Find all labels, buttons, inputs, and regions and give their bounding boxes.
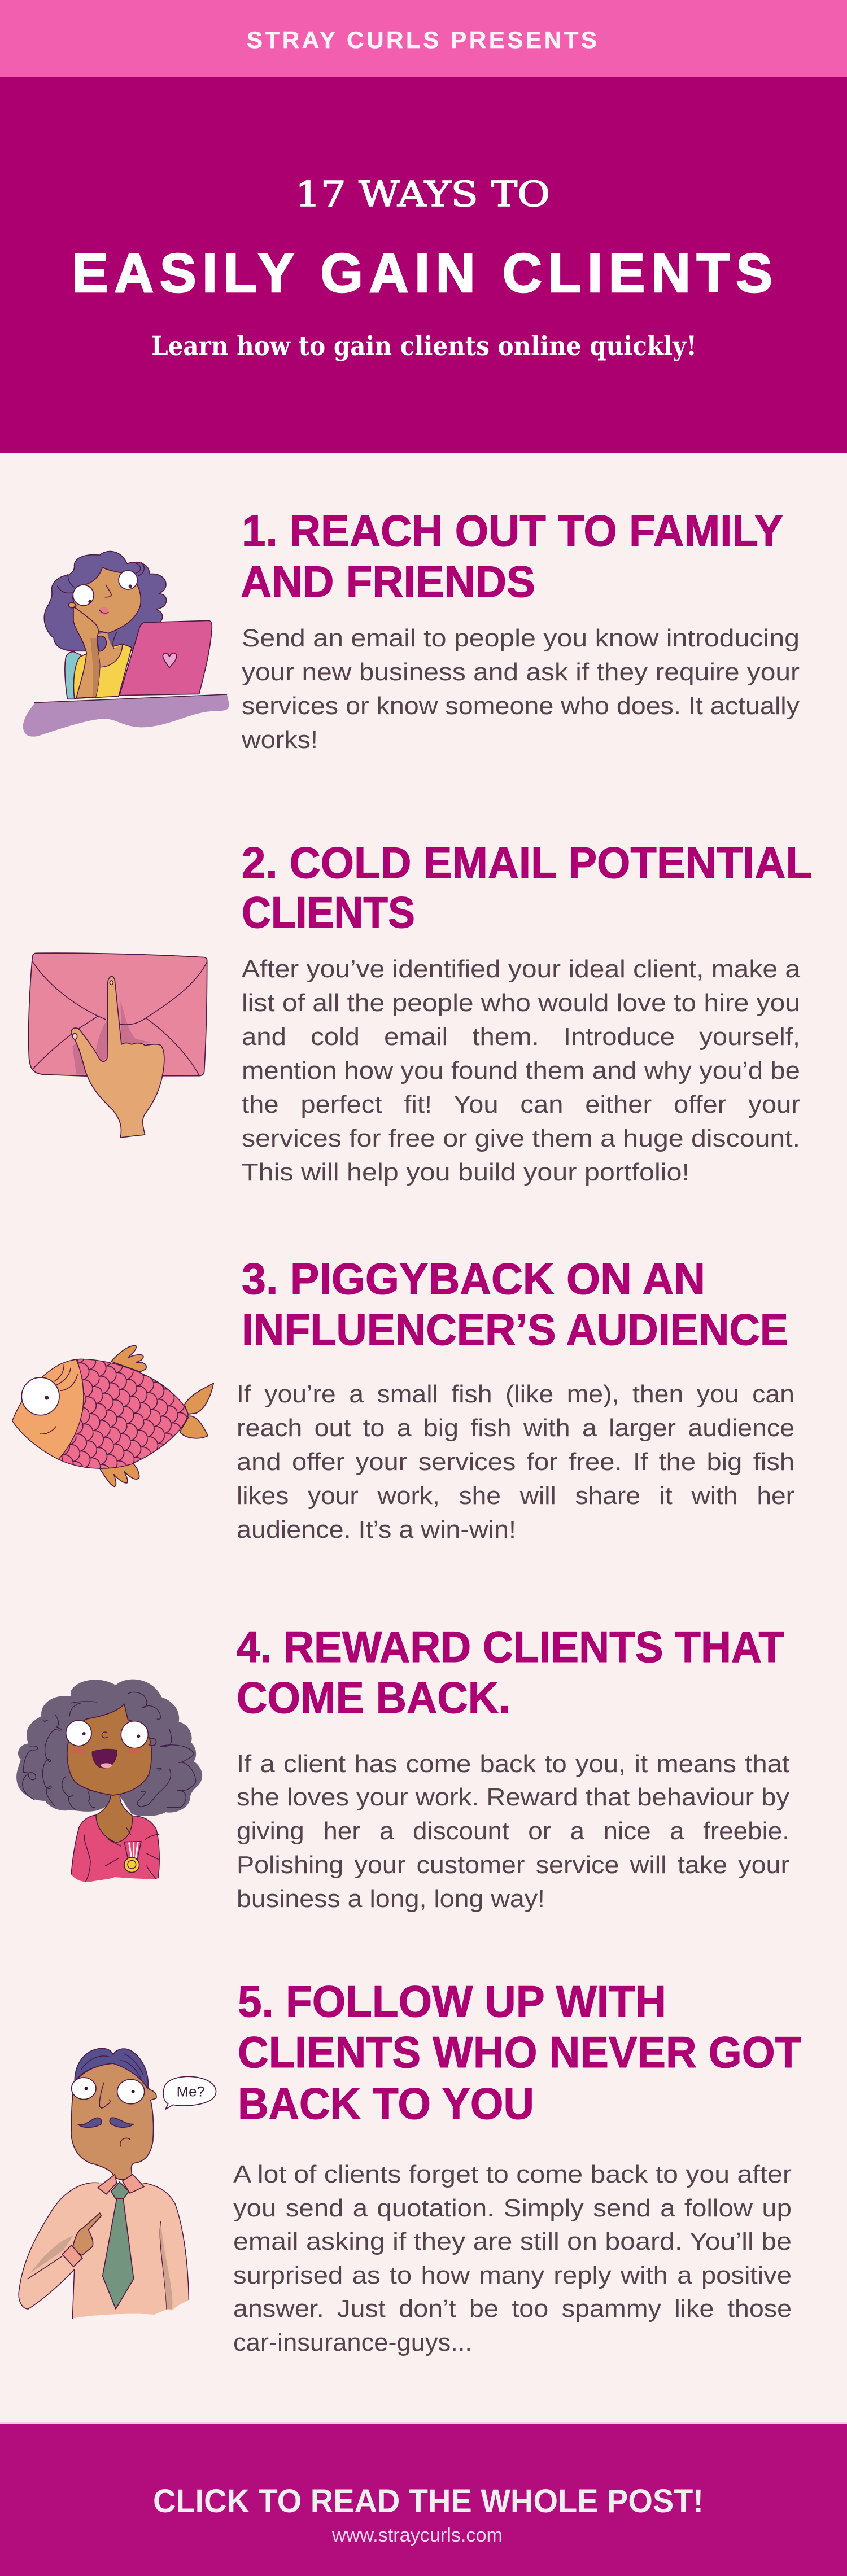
panel: step 3 [12, 1254, 794, 1543]
body text: and offer your services for free. If the big fish [237, 1448, 794, 1476]
icon: woman at laptop [23, 552, 229, 737]
heading: INFLUENCER’S AUDIENCE [242, 1305, 788, 1354]
heading: CLIENTS [242, 887, 415, 937]
body text: If you’re a small fish (like me), then you can [237, 1380, 794, 1408]
heading: BACK TO YOU [238, 2079, 534, 2128]
body text: and cold email them. Introduce yourself, [242, 1023, 800, 1051]
body text: surprised as to how many reply with a positive [233, 2262, 792, 2289]
body text: reach out to a big fish with a larger audience [237, 1414, 794, 1442]
body text: A lot of clients forget to come back to you after [233, 2160, 792, 2188]
call to action: CLICK TO READ THE WHOLE POST! [153, 2483, 704, 2520]
body text: answer. Just don’t be too spammy like those [233, 2295, 792, 2323]
heading [237, 1622, 784, 1722]
heading: 1. REACH OUT TO FAMILY [242, 506, 783, 556]
icon: envelope and hand [29, 953, 207, 1138]
heading [242, 1254, 788, 1354]
body text: services for free or give them a huge discount. [242, 1125, 800, 1152]
heading: AND FRIENDS [241, 557, 535, 606]
body text [233, 2160, 792, 2356]
speech bubble [163, 2076, 216, 2109]
panel: step 5 [19, 1976, 801, 2356]
body text: After you’ve identified your ideal client, make a [242, 955, 801, 983]
body text [237, 1380, 794, 1543]
heading [238, 1976, 801, 2128]
top banner: STRAY CURLS PRESENTS [247, 27, 597, 53]
heading: 4. REWARD CLIENTS THAT [237, 1622, 784, 1672]
panel: step 4 [16, 1622, 789, 1913]
icon: happy woman with medal [16, 1680, 202, 1882]
title line: 17 ways to: 17 WAYS TO [295, 173, 550, 215]
body text: likes your work, she will share it with her [237, 1482, 794, 1510]
heading [241, 506, 783, 606]
panel: step 1 [23, 506, 800, 754]
subtitle: Learn how to gain clients online quickly! [151, 331, 697, 362]
heading: 5. FOLLOW UP WITH [238, 1976, 666, 2026]
body text: you send a quotation. Simply send a follow up [233, 2194, 792, 2222]
body text: This will help you build your portfolio! [242, 1158, 689, 1186]
website url: www.straycurls.com [331, 2525, 503, 2546]
heading [242, 838, 812, 937]
body text: she loves your work. Reward that behaviour by [237, 1783, 789, 1811]
body text [237, 1750, 789, 1913]
icon: man pointing at himself [19, 2048, 216, 2319]
body text: Polishing your customer service will take your [237, 1851, 789, 1879]
body text: the perfect fit! You can either offer your [242, 1091, 800, 1118]
body text: email asking if they are still on board. You’ll be [233, 2228, 792, 2255]
body text: list of all the people who would love to hire you [242, 989, 800, 1017]
body text: business a long, long way! [237, 1885, 545, 1913]
top banner [0, 0, 847, 77]
speech bubble: Me? [177, 2084, 205, 2100]
body text: car-insurance-guys... [233, 2329, 472, 2356]
body text: If a client has come back to you, it means that [237, 1750, 789, 1778]
heading: 2. COLD EMAIL POTENTIAL [242, 838, 812, 887]
body text: audience. It’s a win-win! [237, 1516, 516, 1543]
body text: mention how you found them and why you’d be [242, 1057, 800, 1084]
panel: step 2 [29, 838, 812, 1186]
body text: works! [241, 726, 318, 754]
body text: services or know someone who does. It actually [242, 692, 800, 720]
body text: Send an email to people you know introducing [242, 624, 800, 652]
footer band [0, 2422, 847, 2576]
body text [241, 624, 800, 754]
title line: easily gain clients: EASILY GAIN CLIENTS [72, 242, 772, 304]
body text: your new business and ask if they require your [242, 658, 800, 686]
body text: giving her a discount or a nice a freebie. [237, 1817, 789, 1845]
heading: 3. PIGGYBACK ON AN [242, 1254, 705, 1304]
icon: fish [12, 1346, 213, 1486]
title panel [0, 77, 847, 453]
body text [242, 955, 801, 1186]
heading: COME BACK. [237, 1673, 510, 1722]
heading: CLIENTS WHO NEVER GOT [238, 2027, 801, 2077]
